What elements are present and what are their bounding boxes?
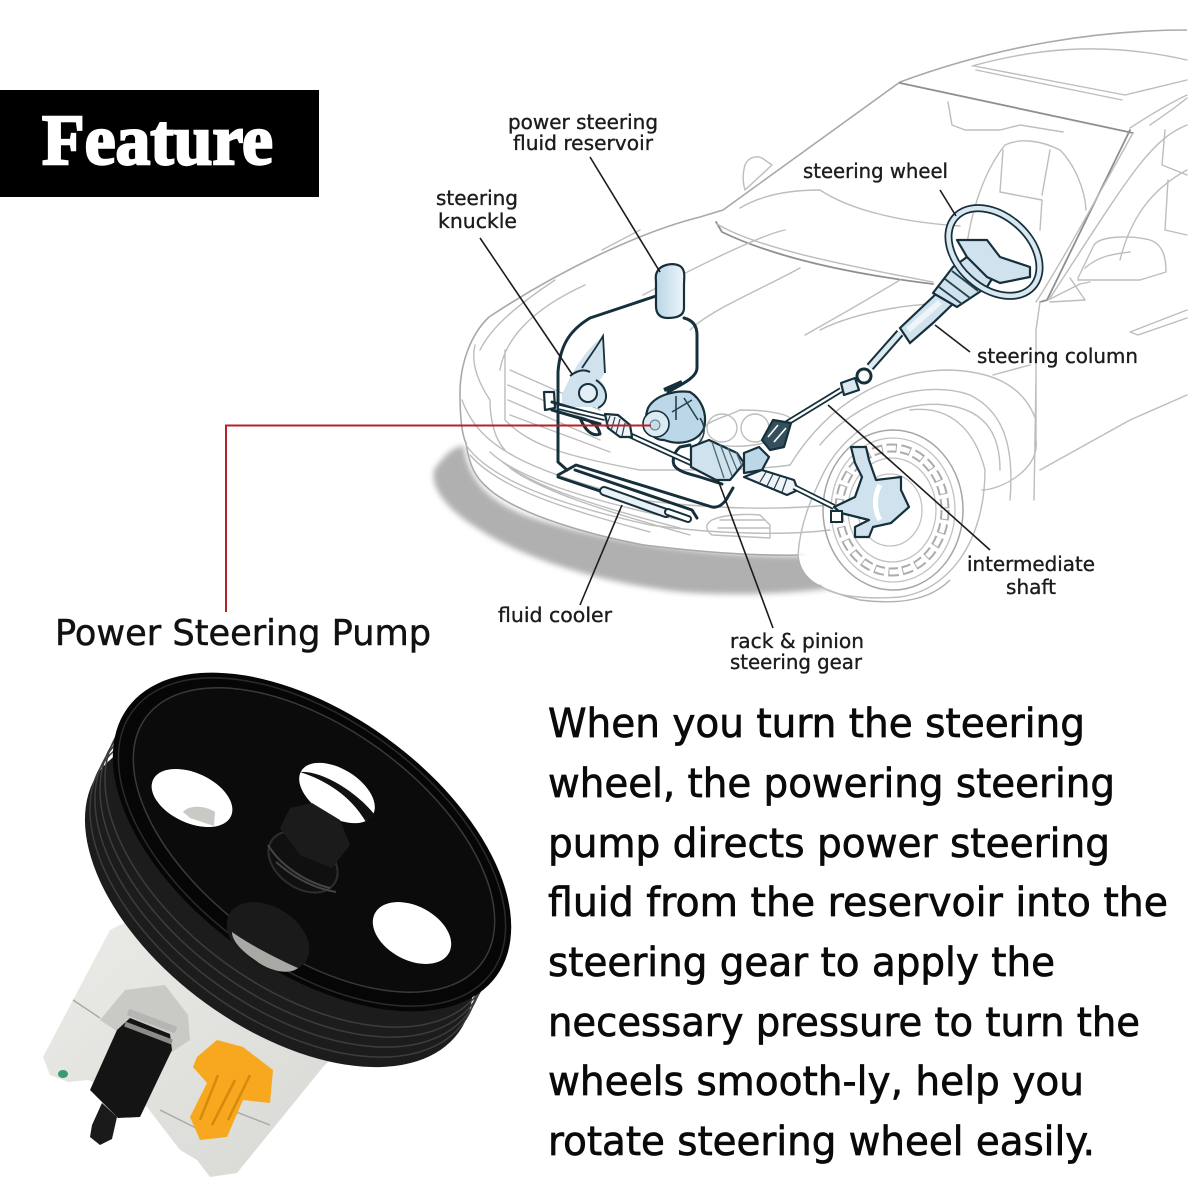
label: rack and pinion steering gear <box>730 629 864 674</box>
label: steering knuckle: steering <box>436 186 518 210</box>
ground shadow <box>433 446 832 594</box>
product photo: pump <box>26 604 572 1177</box>
fluid reservoir <box>656 264 684 318</box>
label: power steering fluid reservoir: fluid reservoir <box>513 131 654 155</box>
label: Power Steering Pump: Power Steering Pump <box>55 613 431 654</box>
description text block: fluid from the reservoir into the <box>548 880 1168 926</box>
leader lines <box>480 157 990 628</box>
front wheel <box>798 409 985 602</box>
description text block <box>548 701 1168 1165</box>
heading banner: Feature: Feature <box>42 100 273 180</box>
description text block: rotate steering wheel easily. <box>548 1119 1095 1165</box>
car body outline <box>460 30 1187 555</box>
pulley face <box>52 604 572 1080</box>
grooved pulley back <box>26 630 552 1134</box>
label: steering wheel: steering wheel <box>803 159 948 183</box>
car cutaway illustration <box>433 30 1187 602</box>
label: steering column: steering column <box>977 344 1138 368</box>
label: power steering fluid reservoir <box>508 110 658 155</box>
label: power steering fluid reservoir: power steering <box>508 110 658 134</box>
pulley hole 3 <box>214 888 322 986</box>
description text block: When you turn the steering <box>548 701 1085 747</box>
steering knuckle left <box>544 336 612 435</box>
label: fluid cooler: fluid cooler <box>498 603 613 627</box>
fluid cooler <box>604 491 688 519</box>
label: intermediate shaft <box>967 552 1095 599</box>
label: steering knuckle <box>436 186 518 233</box>
label: intermediate shaft: intermediate <box>967 552 1095 576</box>
orange cap <box>190 1040 273 1140</box>
fluid lines <box>558 296 733 520</box>
rack and pinion steering gear <box>559 407 834 507</box>
label: steering knuckle: knuckle <box>438 209 517 233</box>
description text block: wheel, the powering steering <box>548 761 1115 807</box>
power steering pump (diagram) <box>643 382 705 450</box>
description text block: necessary pressure to turn the <box>548 1000 1140 1046</box>
description text block: wheels smooth-ly, help you <box>548 1059 1084 1105</box>
heading banner: Feature <box>0 90 319 197</box>
callout line to pump <box>226 426 651 612</box>
intermediate shaft <box>762 369 871 450</box>
label: rack and pinion steering gear: steering gear <box>730 650 863 674</box>
pump housing <box>43 900 380 1177</box>
label: intermediate shaft: shaft <box>1006 575 1056 599</box>
description text block: pump directs power steering <box>548 821 1110 867</box>
pulley hole 2 <box>289 750 385 836</box>
pulley hole 1 <box>142 757 242 839</box>
label: rack and pinion steering gear: rack & pinion <box>730 629 864 653</box>
steering wheel <box>931 190 1057 314</box>
black connector <box>90 1012 176 1145</box>
centre bolt <box>257 803 350 905</box>
steering knuckle right <box>831 447 909 537</box>
description text block: steering gear to apply the <box>548 940 1055 986</box>
pulley hole 4 <box>362 889 462 977</box>
steering column <box>870 257 993 367</box>
